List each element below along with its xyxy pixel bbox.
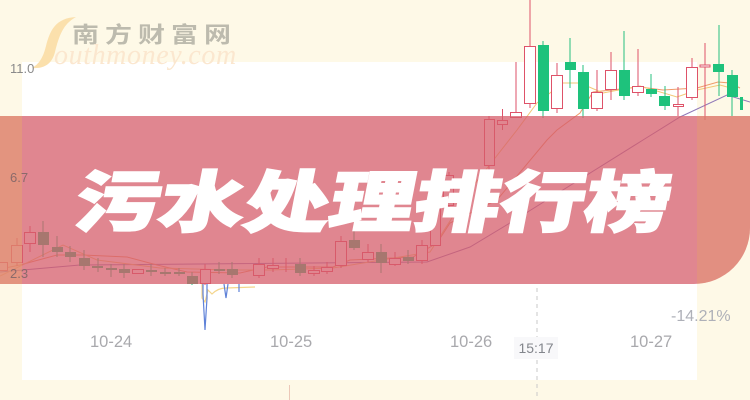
pink title band (0, 116, 750, 284)
date label 10-27: 10-27 (630, 333, 672, 351)
hollow red candle bodies (0, 46, 710, 284)
red wicks (17, 0, 705, 285)
axis price label 2.3: 2.3 (10, 266, 28, 281)
dashed crosshair line (536, 288, 538, 400)
percentage label: -14.21% (671, 308, 731, 325)
logo: southmoney (32, 17, 237, 71)
green candle bodies (38, 45, 743, 284)
volume spikes below band (202, 284, 255, 330)
date label 10-26: 10-26 (450, 333, 492, 351)
date label 10-24: 10-24 (90, 333, 132, 351)
title: 污水处理排行榜 (67, 150, 681, 246)
chart panel: white background (22, 62, 697, 380)
date label 10-25: 10-25 (270, 333, 312, 351)
logo: southmoney: 南方财富网 (72, 17, 237, 49)
faint wick below panel (288, 385, 290, 400)
axis price label 6.7: 6.7 (10, 170, 28, 185)
green wicks (43, 25, 732, 285)
time tag 15:17: 15:17 (518, 340, 554, 356)
time tag 15:17 (514, 337, 558, 359)
logo: southmoney: outhmoney.com (54, 40, 237, 71)
axis price label 11.0: 11.0 (10, 61, 34, 76)
moving average lines (0, 82, 750, 276)
